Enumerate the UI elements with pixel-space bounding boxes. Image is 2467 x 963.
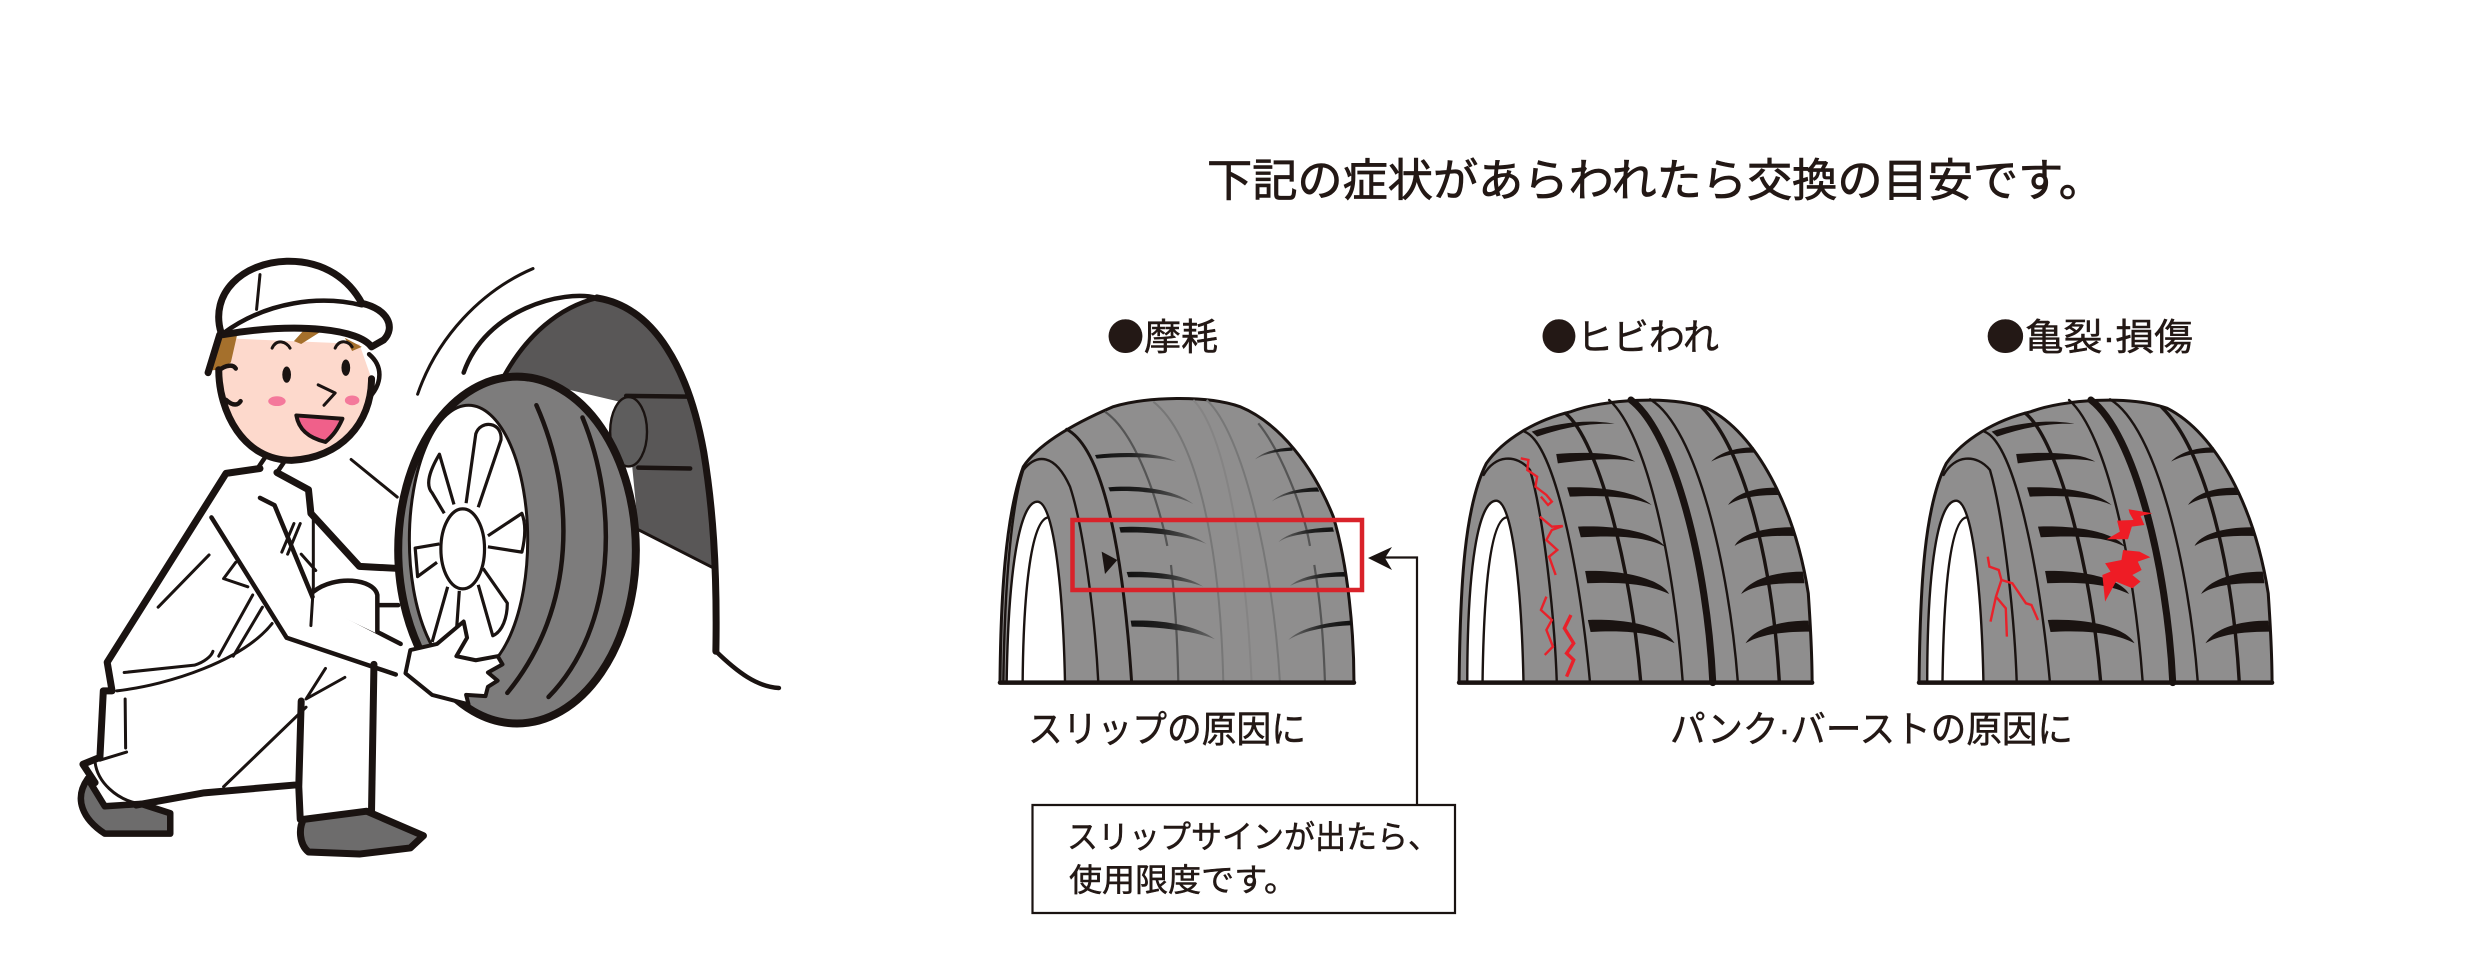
cracks on sidewall: [1521, 458, 2038, 677]
tires: cracked and damaged: [1459, 399, 2272, 683]
callout box: [1032, 805, 1455, 913]
callout box: 使用限度です。: [1069, 862, 1297, 898]
tire: splits: [1919, 399, 2272, 683]
mouth: [296, 415, 342, 442]
mechanic: [81, 261, 502, 854]
caption: puncture and burst: パンク·バーストの原因に: [1670, 709, 2073, 750]
caption: slip: スリップの原因に: [1028, 709, 1306, 750]
eyes: [282, 360, 350, 383]
arrow: callout to highlight: [1368, 547, 1417, 805]
cap: [219, 261, 389, 347]
label: cracking: ●ヒビわれ: [1541, 307, 1719, 361]
left shoe: [81, 779, 170, 834]
red highlight box: [1072, 520, 1362, 590]
suspension line: [351, 460, 397, 497]
glove: [405, 621, 502, 704]
brows and nose: [272, 342, 352, 405]
tire: [398, 377, 636, 723]
tire: cracks: [1459, 399, 1812, 683]
title: 下記の症状があらわれたら交換の目安です。: [1207, 155, 2104, 206]
cheeks: [268, 395, 359, 406]
car wheel arch: [418, 269, 779, 688]
tire: worn: [1000, 399, 1354, 683]
right shoe: [300, 811, 423, 854]
tear damage: [2102, 509, 2153, 602]
label: splits and damage: ●亀裂·損傷: [1986, 307, 2193, 361]
wheel spokes: [415, 424, 525, 642]
illustration: mechanic fitting a tire: [81, 261, 779, 854]
neck: [258, 454, 287, 473]
body silhouette: [83, 468, 401, 819]
label: wear: ●摩耗: [1107, 307, 1218, 361]
suit outline: [83, 468, 401, 819]
callout box: スリップサインが出たら、: [1067, 819, 1439, 855]
slip sign triangle: [1102, 552, 1117, 574]
head: [208, 261, 389, 460]
